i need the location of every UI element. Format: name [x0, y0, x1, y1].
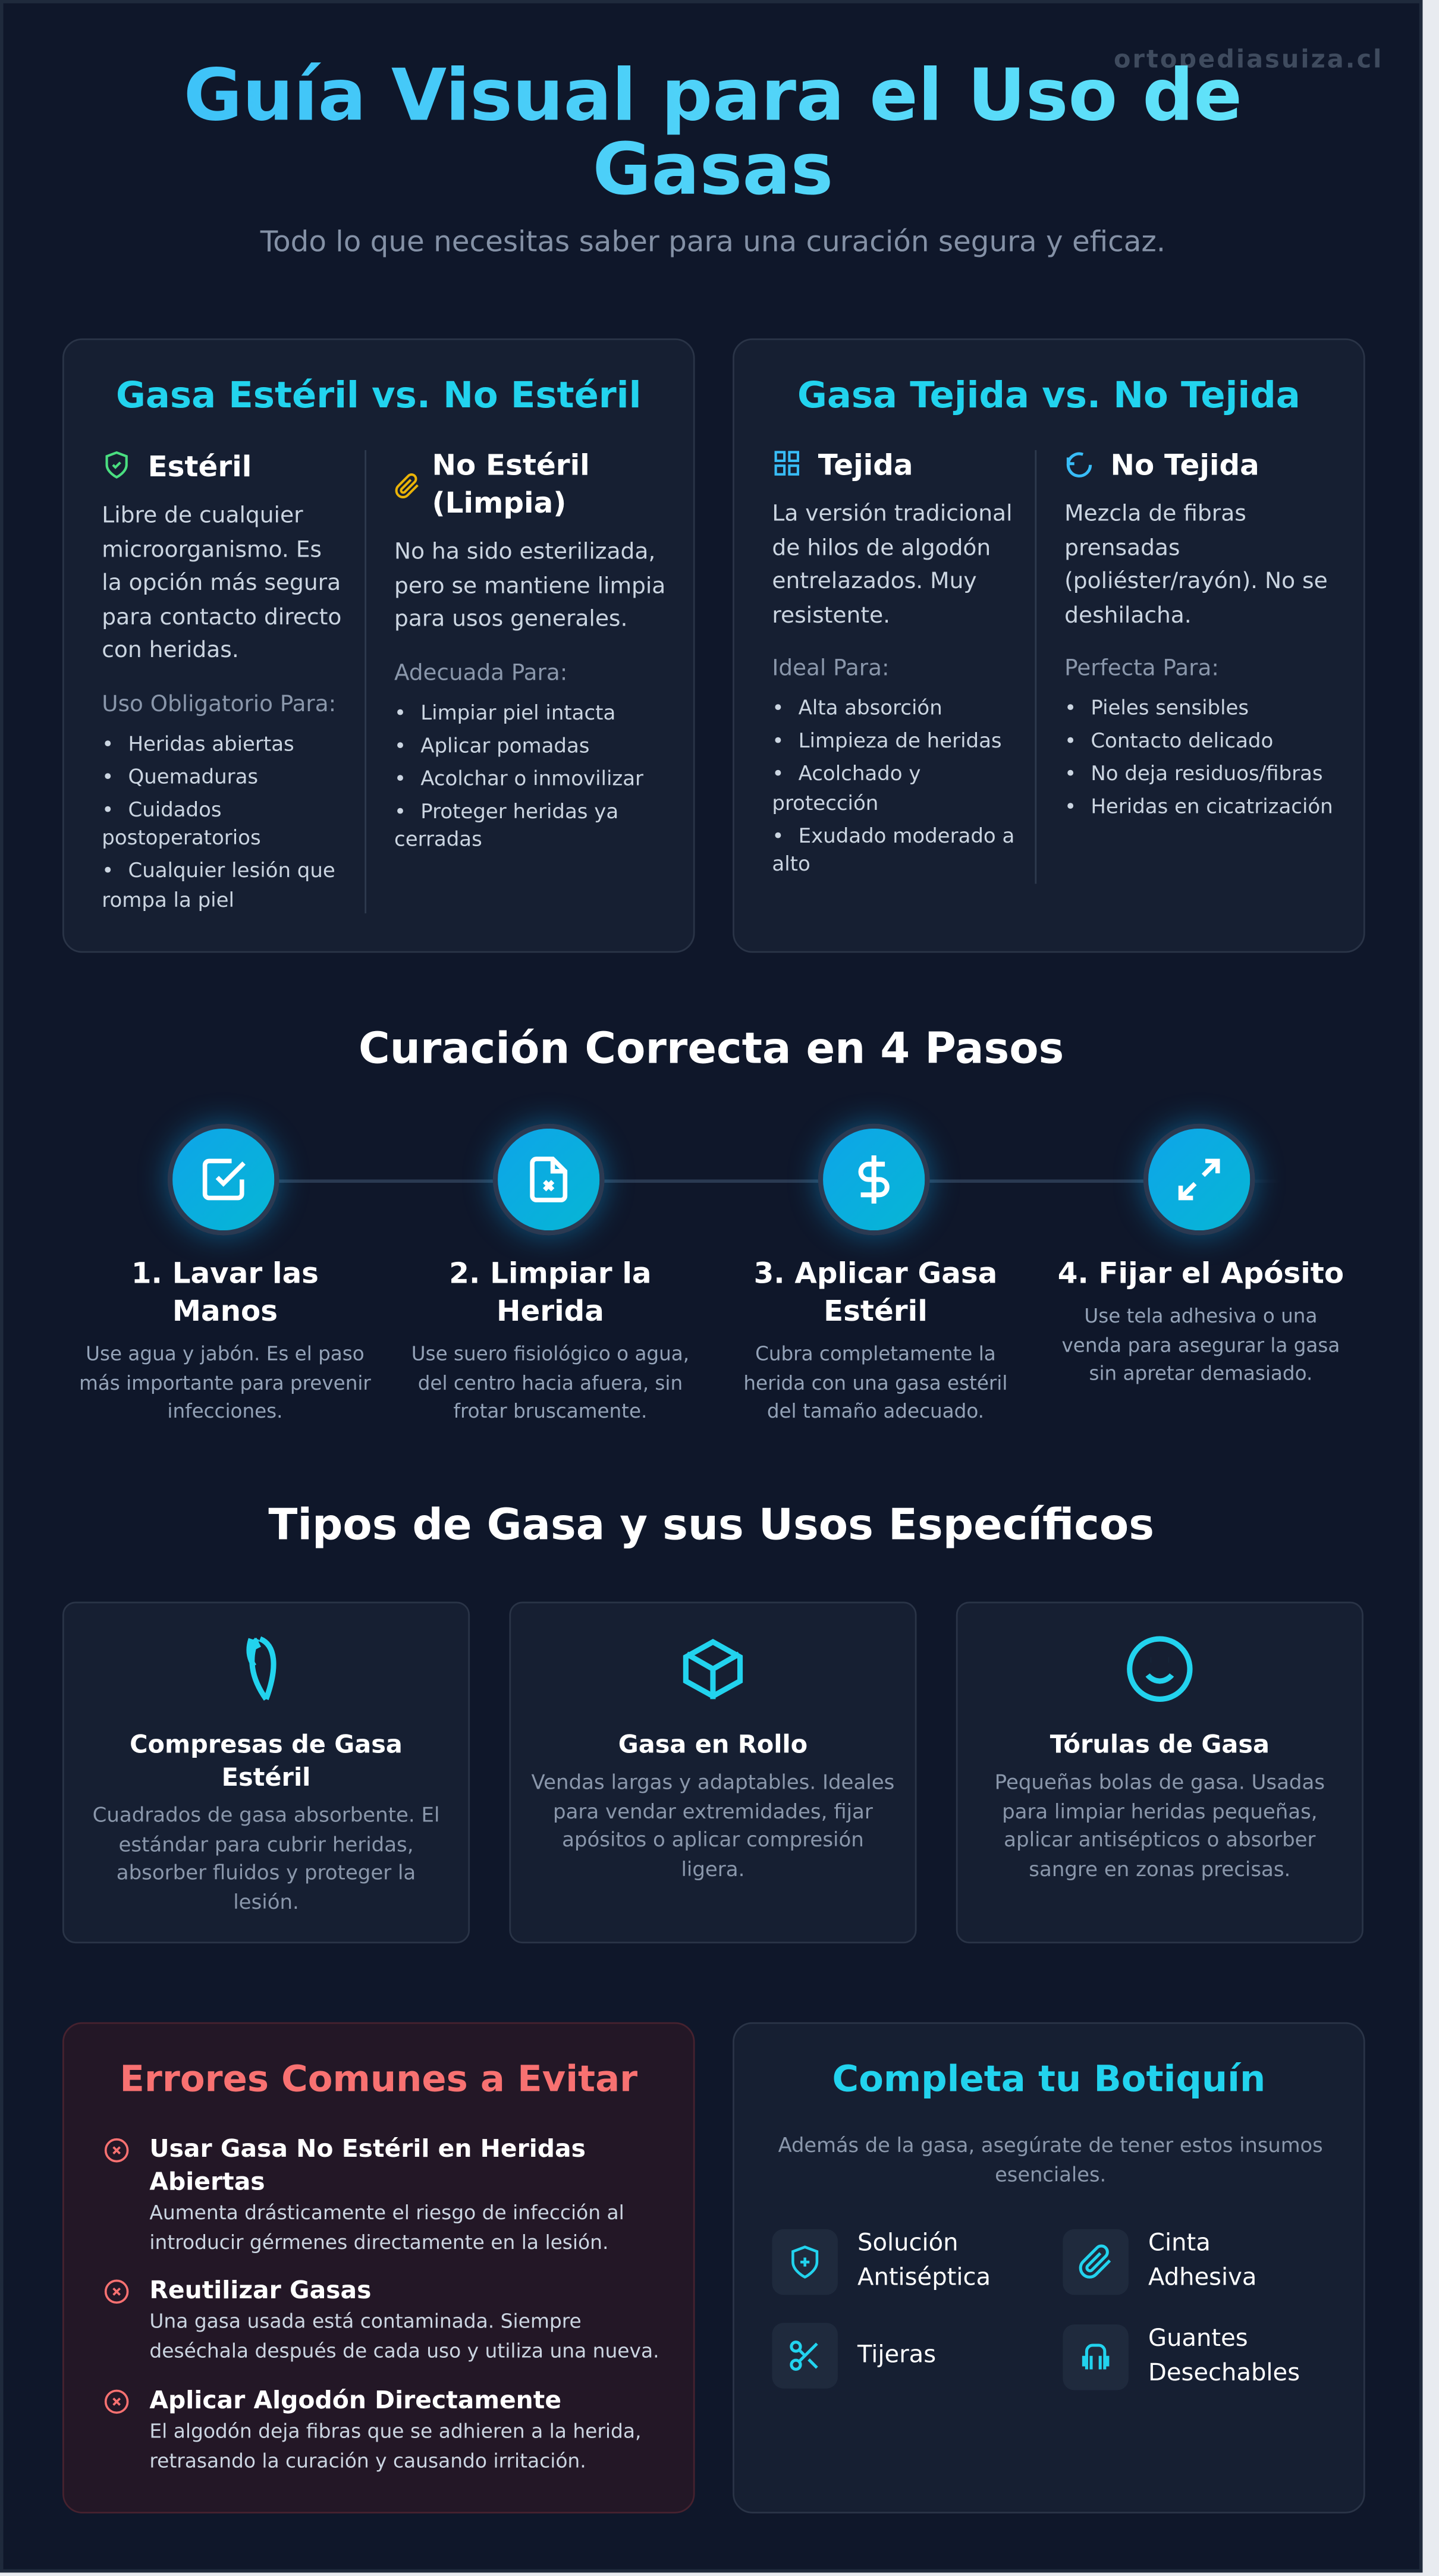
card: rollo	[509, 1601, 917, 1943]
title	[0, 61, 1426, 209]
column: esteril: Quemaduras	[128, 765, 258, 788]
column: tejida: La versión tradicional de hilos de algodón entrelazados. Muy resistente.	[772, 501, 1013, 629]
item: guantes: Guantes	[1148, 2326, 1248, 2352]
panel: errores	[62, 2022, 695, 2514]
column: no esteril: Limpiar piel intacta	[420, 700, 615, 724]
item: antiseptica: Antiséptica	[857, 2264, 991, 2291]
icon	[246, 1636, 277, 1701]
card: compresas: Cuadrados de gasa absorbente. El estándar para cubrir heridas, absorber fluidos y proteger la lesión.	[93, 1804, 439, 1913]
error 3: El algodón deja fibras que se adhieren a la herida, retrasando la curación y causando irritación.	[149, 2420, 641, 2471]
column: no esteril: Acolchar o inmovilizar	[420, 766, 643, 789]
step 4	[1058, 1107, 1344, 1385]
error 2: deséchala después de cada uso y utiliza una nueva.	[149, 2339, 659, 2361]
column: tejida	[772, 450, 1014, 875]
card: torulas	[956, 1601, 1363, 1943]
intro: Además de la gasa, asegúrate de tener estos insumos esenciales.	[778, 2134, 1323, 2186]
step 3: Cubra completamente la herida con una gasa estéril del tamaño adecuado.	[743, 1342, 1007, 1422]
error 2: Una gasa usada está contaminada. Siempre	[149, 2310, 582, 2333]
title: Gasas	[593, 130, 833, 212]
column: no tejida: No deja residuos/fibras	[1091, 762, 1323, 786]
icon	[683, 1639, 743, 1699]
item: antiseptica: Solución	[857, 2231, 959, 2257]
subtitle: Todo lo que necesitas saber para una curación segura y eficaz.	[260, 227, 1165, 259]
heading: tipos: Tipos de Gasa y sus Usos Específicos	[268, 1501, 1154, 1551]
card: compresas: Compresas de Gasa Estéril	[130, 1730, 403, 1792]
column: no tejida: Pieles sensibles	[1091, 696, 1249, 720]
error 1	[105, 2135, 624, 2253]
step 2: 2. Limpiar la Herida	[449, 1258, 652, 1329]
icon: expand	[1143, 1124, 1255, 1235]
column: tejida: Limpieza de heridas	[799, 730, 1002, 752]
error 2: Reutilizar Gasas	[149, 2277, 371, 2305]
heading: Completa tu Botiquín	[832, 2060, 1265, 2101]
column: esteril: Estéril	[148, 452, 252, 485]
heading: pasos: Curación Correcta en 4 Pasos	[359, 1025, 1064, 1075]
column: esteril: Uso Obligatorio Para:	[102, 691, 336, 717]
column: tejida: Alta absorción	[799, 696, 942, 720]
column: no esteril: Adecuada Para:	[394, 659, 567, 686]
card: rollo: Vendas largas y adaptables. Ideales para vendar extremidades, fijar apósitos o aplicar compresión ligera.	[532, 1771, 894, 1880]
item: guantes: Desechables	[1148, 2360, 1300, 2386]
item: tijeras	[772, 2323, 936, 2388]
step 1: Use agua y jabón. Es el paso más importante para prevenir infecciones.	[79, 1342, 371, 1422]
column: no tejida: Mezcla de fibras prensadas (poliéster/rayón). No se deshilacha.	[1064, 501, 1328, 629]
card: torulas: Tórulas de Gasa	[1050, 1730, 1270, 1760]
column: no tejida	[1064, 450, 1333, 818]
panel: tejida vs no tejida	[733, 338, 1365, 953]
heading: Gasa Estéril vs. No Estéril	[116, 376, 641, 417]
icon	[1127, 1636, 1193, 1702]
column: tejida: Acolchado y protección	[772, 762, 920, 814]
item: cinta	[1063, 2229, 1256, 2295]
error 2	[105, 2277, 659, 2362]
column: esteril: Cuidados postoperatorios	[102, 797, 261, 849]
error 3: Aplicar Algodón Directamente	[149, 2387, 561, 2415]
step 3	[743, 1107, 1007, 1422]
column: no esteril	[394, 450, 665, 851]
column: no esteril: No Estéril (Limpia)	[432, 450, 590, 521]
card: torulas: Pequeñas bolas de gasa. Usadas para limpiar heridas pequeñas, aplicar antisépticos o absorber sangre en zonas precisas.	[995, 1771, 1325, 1880]
step 2: Use suero fisiológico o agua, del centro hacia afuera, sin frotar bruscamente.	[411, 1342, 689, 1422]
column: esteril: Libre de cualquier microorganismo. Es la opción más segura para contacto directo con heridas.	[102, 502, 341, 664]
card: rollo: Gasa en Rollo	[618, 1730, 808, 1760]
item: guantes	[1063, 2324, 1300, 2390]
card: compresas	[62, 1601, 470, 1943]
icon: check	[168, 1124, 279, 1235]
column: tejida: Ideal Para:	[772, 655, 890, 681]
heading: Gasa Tejida vs. No Tejida	[797, 376, 1300, 417]
step 4: 4. Fijar el Apósito	[1058, 1258, 1344, 1291]
panel: botiquin	[733, 2022, 1365, 2514]
column: esteril	[102, 451, 341, 911]
icon: file	[493, 1124, 605, 1235]
column: no tejida: No Tejida	[1110, 450, 1259, 483]
step 3: 3. Aplicar Gasa Estéril	[754, 1258, 997, 1329]
heading: Errores Comunes a Evitar	[120, 2060, 637, 2101]
title: Guía Visual para el Uso de	[184, 56, 1242, 138]
step 2	[411, 1107, 689, 1422]
item: tijeras: Tijeras	[857, 2342, 936, 2368]
error 1: Aumenta drásticamente el riesgo de infección al introducir gérmenes directamente en la lesión.	[149, 2201, 624, 2253]
icon: dollar	[818, 1124, 930, 1235]
step 1	[79, 1107, 371, 1422]
panel: esteril vs no esteril	[62, 338, 695, 953]
column: tejida: Tejida	[818, 450, 913, 483]
column: esteril: Heridas abiertas	[128, 732, 294, 755]
watermark: ortopediasuiza.cl	[1114, 45, 1383, 74]
error 3	[105, 2387, 641, 2471]
step 4: Use tela adhesiva o una venda para asegurar la gasa sin apretar demasiado.	[1061, 1304, 1340, 1385]
column: no tejida: Contacto delicado	[1091, 730, 1273, 752]
item: cinta: Cinta	[1148, 2231, 1211, 2257]
column: esteril: Cualquier lesión que rompa la piel	[102, 859, 335, 911]
item: antiseptica	[772, 2229, 991, 2295]
column: no esteril: Proteger heridas ya cerradas	[394, 799, 618, 851]
column: no esteril: Aplicar pomadas	[420, 733, 590, 756]
item: cinta: Adhesiva	[1148, 2264, 1256, 2291]
error 1: Usar Gasa No Estéril en Heridas Abiertas	[149, 2135, 586, 2197]
column: no tejida: Heridas en cicatrización	[1091, 795, 1333, 818]
column: no tejida: Perfecta Para:	[1064, 655, 1219, 681]
column: tejida: Exudado moderado a alto	[772, 824, 1014, 875]
column: no esteril: No ha sido esterilizada, pero se mantiene limpia para usos generales.	[394, 539, 665, 633]
step 1: 1. Lavar las Manos	[131, 1258, 319, 1329]
